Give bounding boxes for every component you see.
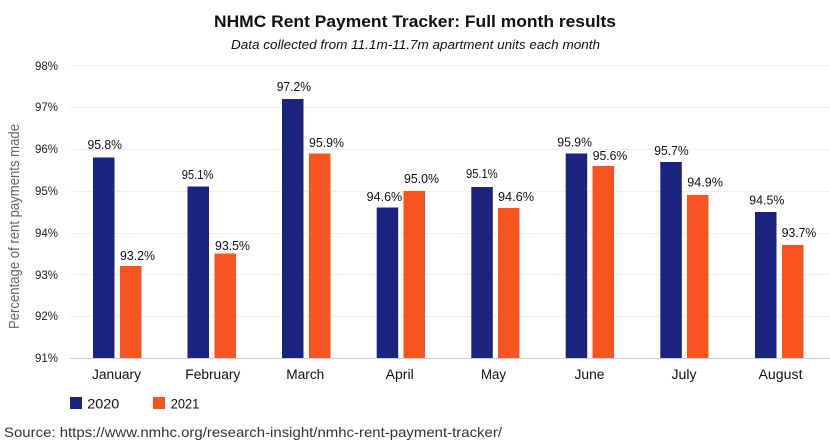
y-axis labels: 92% (35, 311, 58, 323)
data labels (88, 80, 816, 263)
data labels: 94.6% (498, 190, 534, 204)
data labels: 95.9% (309, 136, 344, 150)
data labels: 95.0% (404, 172, 439, 186)
data labels: 95.1% (466, 167, 498, 181)
data labels: 93.7% (782, 226, 816, 240)
y-axis labels: 91% (35, 353, 58, 365)
legend (70, 396, 199, 412)
data labels: 95.8% (88, 138, 122, 152)
data labels: 97.2% (277, 80, 311, 94)
title: NHMC Rent Payment Tracker: Full month results (214, 12, 616, 31)
data labels: 94.9% (687, 176, 723, 190)
y-axis labels: 93% (35, 270, 58, 282)
y-axis labels: 96% (35, 144, 58, 156)
data labels: 95.7% (654, 144, 689, 158)
x-axis month labels: May (481, 367, 506, 382)
y-axis labels: 98% (35, 61, 58, 73)
bars: 2020 series (93, 99, 776, 358)
bars: 2021 series (120, 154, 804, 358)
x-axis month labels: July (672, 367, 697, 382)
data labels: 95.1% (182, 168, 213, 182)
y-axis labels: 95% (35, 186, 58, 198)
y-axis labels (35, 61, 58, 365)
x-axis month labels: August (758, 367, 803, 382)
subtitle: Data collected from 11.1m-11.7m apartment units each month (231, 37, 600, 52)
x-axis month labels: April (386, 367, 414, 382)
data labels: 95.9% (557, 136, 592, 150)
data labels: 94.5% (749, 194, 784, 208)
y-axis labels: 94% (35, 228, 58, 240)
x-axis month labels: March (286, 367, 324, 382)
source note: Source: https://www.nmhc.org/research-insight/nmhc-rent-payment-tracker/ (4, 424, 502, 440)
data labels: 93.2% (120, 249, 155, 263)
x-axis month labels: January (92, 367, 141, 382)
data labels: 95.6% (593, 149, 627, 163)
x-axis month labels (92, 367, 803, 382)
legend: 2021 (171, 396, 199, 412)
y-axis title: Percentage of rent payments made (7, 124, 23, 329)
x-axis month labels: February (185, 367, 241, 382)
legend: 2020 (87, 396, 119, 412)
data labels: 93.5% (215, 239, 250, 253)
x-axis month labels: June (574, 367, 604, 382)
data labels: 94.6% (367, 190, 402, 204)
y-axis labels: 97% (35, 102, 58, 114)
